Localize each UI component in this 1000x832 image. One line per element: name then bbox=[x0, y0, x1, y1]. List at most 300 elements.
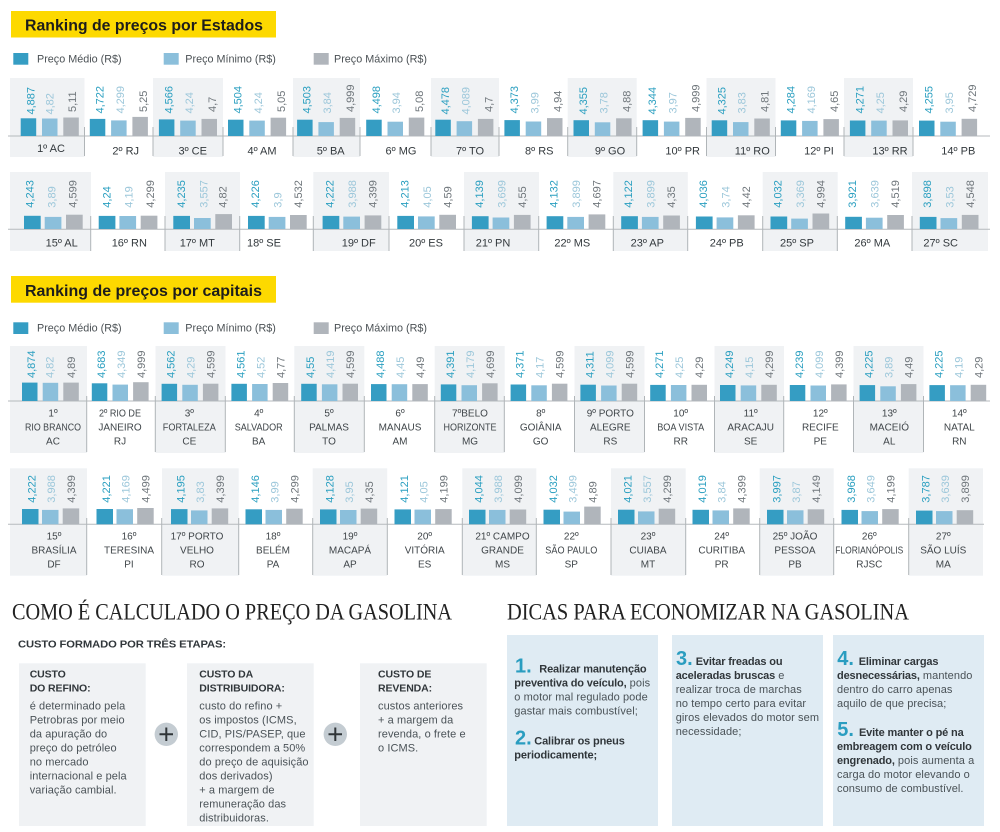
panel: dicas 4 e 5: aquilo de que precisa; bbox=[837, 698, 946, 710]
chart: capitais 2: 4,683 bbox=[96, 350, 108, 378]
chart: capitais 18: 4,299 bbox=[290, 475, 302, 503]
chart: estados 19 DF bbox=[323, 180, 381, 229]
panel: dicas 4 e 5: 5. bbox=[837, 719, 854, 741]
chart: estados 5 BA bbox=[297, 84, 357, 136]
chart: capitais 17: 3,83 bbox=[195, 481, 207, 503]
chart: capitais 16: 4,499 bbox=[140, 475, 152, 503]
heading: ranking por capitais bbox=[11, 276, 276, 303]
panel: dicas 1 e 2: gastar mais combustível; bbox=[514, 706, 638, 718]
panel: dicas 4 e 5: dentro do carro apenas bbox=[837, 684, 953, 696]
panel backgrounds: estados row 1 bbox=[10, 78, 913, 157]
labels: capitais row 2: 27º bbox=[936, 531, 951, 542]
chart: estados 11 RO bbox=[712, 87, 772, 136]
chart: capitais 11: 4,15 bbox=[744, 357, 756, 378]
labels: capitais row 2: CUIABA bbox=[629, 545, 667, 556]
chart: estados 20 ES: 4,05 bbox=[422, 186, 434, 208]
panel backgrounds: capitais row 2 bbox=[10, 468, 983, 576]
chart: estados 9 GO: 4,88 bbox=[622, 91, 634, 112]
labels: capitais row 1: SALVADOR bbox=[235, 423, 283, 434]
chart: capitais 15: 4,399 bbox=[66, 475, 78, 503]
labels: capitais row 2: MA bbox=[936, 559, 951, 570]
labels: capitais row 2: PESSOA bbox=[774, 545, 816, 556]
chart: capitais 9: 4,599 bbox=[624, 350, 636, 378]
chart: estados 26 MA: 4,519 bbox=[890, 180, 902, 208]
chart: estados 8 RS: 4,94 bbox=[552, 91, 564, 112]
chart: estados 3 CE: 4,24 bbox=[184, 92, 196, 114]
chart: estados 1 AC: 4,82 bbox=[44, 93, 56, 114]
chart: capitais 6 bbox=[371, 350, 428, 401]
panel: custo do refino: preço do petróleo bbox=[30, 742, 117, 754]
chart: estados 16 RN bbox=[99, 180, 157, 229]
labels: capitais row 2: 26º bbox=[862, 531, 877, 542]
chart: capitais 18: 4,146 bbox=[250, 475, 262, 503]
chart: estados 24 PB: 3,74 bbox=[720, 186, 732, 208]
labels: capitais row 1: MACEIÓ bbox=[870, 421, 909, 434]
chart: estados 23 AP: 4,122 bbox=[623, 180, 635, 208]
labels: capitais row 2: PB bbox=[788, 559, 802, 570]
chart: estados 15 AL: 4,243 bbox=[24, 180, 36, 208]
panel: custo da distribuidora: distribuidoras. bbox=[199, 812, 269, 824]
legend: capitais bbox=[13, 322, 427, 335]
chart: estados 17 MT: 3,557 bbox=[198, 180, 210, 208]
labels: capitais row 1: RR bbox=[673, 437, 688, 448]
labels: capitais row 2: 22º bbox=[564, 531, 579, 542]
labels: estados row 1: 5º BA bbox=[317, 146, 345, 158]
labels: capitais row 1: NATAL bbox=[944, 423, 975, 434]
chart: capitais 3: 4,29 bbox=[186, 357, 198, 378]
labels: capitais row 2: 17º PORTO bbox=[171, 531, 224, 542]
chart: capitais 5: 4,55 bbox=[305, 357, 317, 378]
chart: capitais 24 bbox=[692, 475, 750, 524]
chart: capitais 3: 4,599 bbox=[206, 350, 218, 378]
chart: capitais 1: 4,82 bbox=[44, 357, 56, 378]
labels: capitais row 2: GRANDE bbox=[481, 545, 524, 556]
panel: custo da distribuidora: remuneração das bbox=[199, 798, 287, 810]
section: dicas bbox=[507, 599, 984, 826]
panel: dicas 1 e 2: Calibrar os pneus bbox=[534, 736, 625, 748]
chart: estados 7 TO: 4,7 bbox=[483, 97, 495, 112]
chart: capitais 13: 4,225 bbox=[864, 350, 876, 378]
chart: estados 22 MS: 4,697 bbox=[592, 180, 604, 208]
panel: custo da distribuidora: + a margem de bbox=[199, 784, 275, 796]
chart: capitais 11 bbox=[720, 350, 777, 401]
chart: estados 1 AC: 4,887 bbox=[25, 87, 37, 114]
chart: estados 23 AP: 3,899 bbox=[646, 180, 658, 208]
chart: estados 8 RS: 4,373 bbox=[509, 86, 521, 114]
chart: estados 24 PB: 4,036 bbox=[698, 180, 710, 208]
panel: custo de revenda: CUSTO DE bbox=[378, 668, 431, 680]
labels: capitais row 1: 8º bbox=[536, 409, 546, 420]
labels: capitais row 2: RO bbox=[190, 559, 205, 570]
labels: estados row 2: 25º SP bbox=[780, 238, 814, 250]
chart: capitais 26 bbox=[842, 475, 899, 524]
legend: estados: Preço Máximo (R$) bbox=[334, 53, 427, 65]
labels: estados row 1: 3º CE bbox=[178, 146, 207, 158]
labels: capitais row 1: RS bbox=[603, 437, 618, 448]
chart: estados 8 RS: 3,99 bbox=[529, 92, 541, 114]
chart: estados 15 AL bbox=[24, 180, 83, 229]
chart: estados 14 PB: 4,729 bbox=[967, 84, 979, 112]
chart: estados 16 RN: 4,24 bbox=[102, 186, 114, 208]
chart: capitais 24: 4,019 bbox=[697, 475, 709, 503]
panel: dicas 1 e 2 bbox=[507, 635, 658, 826]
panel: dicas 4 e 5 bbox=[833, 635, 984, 826]
panel: custo da distribuidora: CUSTO DA bbox=[199, 668, 254, 680]
chart: capitais 17: 4,399 bbox=[215, 475, 227, 503]
labels: estados row 1 bbox=[37, 143, 975, 158]
labels: capitais row 2: ES bbox=[418, 559, 432, 570]
icon: plus 2 bbox=[324, 723, 347, 746]
labels: capitais row 1: GO bbox=[533, 437, 549, 448]
chart: estados 7 TO: 4,478 bbox=[440, 87, 452, 114]
chart: estados 18 SE: 4,532 bbox=[293, 180, 305, 208]
labels: capitais row 2: SÃO LUÍS bbox=[920, 543, 967, 556]
chart: capitais 24: 3,84 bbox=[716, 481, 728, 503]
labels: capitais row 1: 9º PORTO bbox=[587, 409, 634, 420]
labels: estados row 1: 1º AC bbox=[37, 143, 65, 155]
chart: capitais 15 bbox=[22, 475, 79, 524]
labels: capitais row 1: TO bbox=[322, 437, 336, 448]
chart: estados 26 MA: 3,639 bbox=[870, 180, 882, 208]
chart: capitais 17 bbox=[171, 475, 228, 524]
chart: capitais 13 bbox=[860, 350, 916, 401]
labels: capitais row 2: BELÉM bbox=[256, 543, 290, 556]
chart: capitais 20 bbox=[394, 475, 452, 524]
labels: capitais row 2: 18º bbox=[266, 531, 281, 542]
chart: capitais 10: 4,25 bbox=[674, 357, 686, 378]
panel: dicas 1 e 2: Realizar manutenção bbox=[539, 664, 647, 676]
chart: estados 10 PR: 3,97 bbox=[668, 92, 680, 114]
panel: dicas 1 e 2: periodicamente; bbox=[514, 750, 597, 762]
chart: capitais 27 bbox=[916, 475, 973, 524]
panel: custo de revenda: custos anteriores bbox=[378, 700, 464, 712]
chart: capitais 6: 4,49 bbox=[415, 357, 427, 378]
chart: estados 12 PI bbox=[781, 86, 841, 136]
panel: dicas 4 e 5: carga do motor elevando o bbox=[837, 769, 970, 781]
chart: capitais 7: 4,699 bbox=[485, 350, 497, 378]
chart: capitais 26: 3,649 bbox=[866, 475, 878, 503]
chart: capitais 14: 4,29 bbox=[973, 357, 985, 378]
chart: capitais 5 bbox=[301, 350, 358, 401]
panel backgrounds: estados row 2 bbox=[10, 172, 988, 251]
panel: custo da distribuidora: os impostos (ICMS, bbox=[199, 714, 297, 726]
chart: capitais 21 bbox=[469, 475, 526, 524]
chart: capitais 4: 4,77 bbox=[275, 357, 287, 378]
chart: estados 15 AL: 3,89 bbox=[47, 186, 59, 208]
chart: estados 11 RO: 3,83 bbox=[737, 92, 749, 114]
labels: capitais row 1: RIO BRANCO bbox=[25, 423, 81, 434]
chart: capitais 5: 4,599 bbox=[345, 350, 357, 378]
labels: capitais row 2: BRASÍLIA bbox=[31, 543, 77, 556]
chart: estados 13 RR bbox=[850, 86, 910, 136]
chart: estados 19 DF: 4,399 bbox=[368, 180, 380, 208]
panel: custo do refino: da apuração do bbox=[30, 728, 107, 740]
heading: como é calculado: COMO É CALCULADO O PREÇO DA GASOLINA bbox=[12, 599, 452, 624]
labels: capitais row 1: RN bbox=[952, 437, 967, 448]
chart: capitais 19: 3,95 bbox=[344, 481, 356, 503]
labels: capitais row 1: HORIZONTE bbox=[444, 423, 497, 434]
labels: capitais row 2: MT bbox=[641, 559, 655, 570]
panel: custo da distribuidora: custo do refino + bbox=[199, 700, 282, 712]
chart: estados 10 PR bbox=[643, 84, 703, 136]
panel: dicas 4 e 5: Eliminar cargas bbox=[859, 656, 938, 668]
chart: capitais 27: 3,899 bbox=[960, 475, 972, 503]
labels: capitais row 1: 4º bbox=[254, 409, 264, 420]
labels: capitais row 1: RECIFE bbox=[802, 423, 839, 434]
chart: estados 27 SC bbox=[920, 180, 978, 229]
legend: capitais: Preço Mínimo (R$) bbox=[185, 323, 276, 335]
chart: estados 2 RJ: 4,299 bbox=[115, 86, 127, 114]
chart: estados 5 BA: 4,503 bbox=[302, 86, 314, 114]
panel: custo de revenda: REVENDA: bbox=[378, 682, 432, 694]
labels: estados row 2: 19º DF bbox=[342, 238, 376, 250]
chart: estados 21 PN: 4,139 bbox=[474, 180, 486, 208]
labels: estados row 1: 7º TO bbox=[456, 146, 484, 158]
chart: estados 14 PB: 4,255 bbox=[924, 86, 936, 114]
labels: estados row 2: 15º AL bbox=[46, 238, 78, 250]
chart: capitais 8 bbox=[511, 350, 567, 401]
chart: estados 12 PI: 4,65 bbox=[829, 91, 841, 112]
chart: capitais 22 bbox=[544, 475, 601, 524]
panel: custo do refino bbox=[19, 663, 146, 826]
chart: capitais 2: 4,349 bbox=[116, 350, 128, 378]
chart: capitais 16: 4,169 bbox=[120, 475, 132, 503]
chart: capitais 19: 4,128 bbox=[325, 475, 337, 503]
chart: estados 4 AM: 5,05 bbox=[276, 91, 288, 112]
heading: ranking por capitais: Ranking de preços por capitais bbox=[25, 283, 262, 300]
legend: estados: Preço Médio (R$) bbox=[37, 53, 122, 65]
chart: capitais 14: 4,19 bbox=[953, 357, 965, 378]
labels: capitais row 1: PALMAS bbox=[309, 423, 349, 434]
panel: dicas 4 e 5: consumo de combustível. bbox=[837, 783, 964, 795]
chart: capitais 4: 4,52 bbox=[255, 357, 267, 378]
chart: estados 18 SE: 3,9 bbox=[272, 192, 284, 208]
labels: capitais row 2: MS bbox=[495, 559, 510, 570]
chart: capitais 25 bbox=[767, 475, 824, 524]
panel: dica 3 bbox=[672, 635, 823, 826]
chart: estados 12 PI: 4,284 bbox=[785, 86, 797, 114]
chart: estados 7 TO: 4,089 bbox=[460, 87, 472, 114]
chart: estados 19 DF: 4,222 bbox=[325, 180, 337, 208]
chart: estados 11 RO: 4,81 bbox=[760, 91, 772, 112]
labels: capitais row 2: CURITIBA bbox=[698, 545, 745, 556]
chart: capitais 1: 4,89 bbox=[66, 357, 78, 378]
chart: capitais 7: 4,179 bbox=[465, 350, 477, 378]
chart: estados 7 TO bbox=[435, 87, 495, 136]
labels: capitais row 2: PR bbox=[715, 559, 729, 570]
labels: estados row 1: 4º AM bbox=[247, 146, 277, 158]
panel: custo do refino: CUSTO bbox=[30, 668, 66, 680]
chart: capitais 20: 4,199 bbox=[438, 475, 450, 503]
labels: estados row 2: 27º SC bbox=[923, 238, 958, 250]
labels: estados row 1: 2º RJ bbox=[112, 146, 139, 158]
chart: capitais 5: 4,419 bbox=[325, 350, 337, 378]
chart: estados 4 AM: 4,504 bbox=[233, 86, 245, 114]
chart: capitais 4 bbox=[231, 350, 288, 401]
chart: estados 27 SC: 3,53 bbox=[944, 186, 956, 208]
chart: capitais 27: 3,787 bbox=[921, 475, 933, 503]
labels: capitais row 2: DF bbox=[47, 559, 61, 570]
chart: estados 25 SP: 4,032 bbox=[772, 180, 784, 208]
chart: estados 20 ES: 4,213 bbox=[399, 180, 411, 208]
chart: estados 4 AM bbox=[228, 86, 288, 136]
panel: custo da distribuidora: correspondem a 50% bbox=[199, 742, 305, 754]
labels: estados row 1: 14º PB bbox=[941, 146, 975, 158]
labels: estados row 1: 8º RS bbox=[525, 146, 554, 158]
labels: capitais row 1: 1º bbox=[48, 409, 58, 420]
labels: estados row 2: 18º SE bbox=[247, 238, 281, 250]
labels: capitais row 1: PE bbox=[814, 437, 827, 448]
labels: capitais row 1: MANAUS bbox=[379, 423, 422, 434]
chart: estados 13 RR: 4,29 bbox=[898, 91, 910, 112]
labels: capitais row 1 bbox=[25, 409, 975, 448]
chart: capitais 11: 4,299 bbox=[764, 350, 776, 378]
legend: estados bbox=[13, 53, 427, 65]
chart: capitais 23 bbox=[618, 475, 675, 524]
panel: dica 3: necessidade; bbox=[676, 726, 741, 738]
chart: capitais 26: 4,199 bbox=[886, 475, 898, 503]
chart: estados 18 SE bbox=[248, 180, 307, 229]
chart: estados 22 MS bbox=[547, 180, 605, 229]
chart: estados 6 MG: 5,08 bbox=[414, 91, 426, 112]
section: ranking por capitais bbox=[8, 276, 990, 576]
panel: dicas 1 e 2: 1. bbox=[515, 656, 532, 678]
chart: capitais 9 bbox=[580, 350, 637, 401]
labels: capitais row 2: TERESINA bbox=[104, 545, 154, 556]
chart: estados 10 PR: 4,344 bbox=[647, 87, 659, 114]
labels: estados row 2: 26º MA bbox=[854, 238, 891, 250]
labels: estados row 1: 12º PI bbox=[804, 146, 834, 158]
chart: capitais 22: 3,499 bbox=[568, 475, 580, 503]
labels: capitais row 2: MACAPÁ bbox=[329, 543, 371, 556]
chart: capitais 15: 4,222 bbox=[27, 475, 39, 503]
chart: capitais 9: 4,311 bbox=[584, 351, 596, 378]
labels: estados row 2: 21º PN bbox=[476, 238, 510, 250]
panel: custo do refino: DO REFINO: bbox=[30, 682, 91, 694]
chart: capitais 23: 3,557 bbox=[642, 475, 654, 503]
chart: capitais 12: 4,239 bbox=[794, 350, 806, 378]
chart: capitais 27: 3,639 bbox=[940, 475, 952, 503]
labels: capitais row 1: ARACAJU bbox=[727, 423, 774, 434]
chart: estados 3 CE: 4,566 bbox=[163, 86, 175, 114]
labels: capitais row 1: MG bbox=[462, 437, 478, 448]
labels: estados row 1: 6º MG bbox=[386, 146, 416, 158]
chart: capitais 22: 4,032 bbox=[548, 475, 560, 503]
chart: capitais 14 bbox=[929, 350, 986, 401]
chart: capitais 12: 4,099 bbox=[814, 350, 826, 378]
chart: capitais 22: 4,89 bbox=[588, 481, 600, 503]
panel: custo do refino: variação cambial. bbox=[30, 784, 117, 796]
chart: estados 23 AP bbox=[621, 180, 680, 229]
chart: capitais 13: 3,89 bbox=[884, 357, 896, 378]
chart: capitais 26: 3,968 bbox=[846, 475, 858, 503]
chart: capitais 3 bbox=[162, 350, 218, 401]
labels: capitais row 1: 5º bbox=[324, 409, 334, 420]
chart: capitais 18: 3,99 bbox=[270, 481, 282, 503]
panel: custo da distribuidora bbox=[187, 663, 314, 826]
panel: custo do refino: Petrobras por meio bbox=[30, 714, 125, 726]
panel: custo da distribuidora: dos derivados) bbox=[199, 770, 273, 782]
panel: custo de revenda: revenda, o frete e bbox=[378, 728, 466, 740]
chart: capitais 9: 4,099 bbox=[604, 350, 616, 378]
labels: estados row 2 bbox=[46, 238, 958, 250]
chart: capitais 8: 4,371 bbox=[515, 350, 527, 378]
labels: capitais row 2: 20º bbox=[417, 531, 432, 542]
chart: estados 5 BA: 4,999 bbox=[345, 84, 357, 112]
labels: capitais row 1: JANEIRO bbox=[98, 423, 142, 434]
chart: estados 12 PI: 4,169 bbox=[806, 86, 818, 114]
labels: capitais row 1: 6º bbox=[395, 409, 405, 420]
chart: estados 17 MT bbox=[173, 180, 232, 229]
labels: capitais row 2: 21º CAMPO bbox=[475, 531, 530, 542]
labels: capitais row 1: 13º bbox=[882, 409, 897, 420]
labels: estados row 1: 9º GO bbox=[595, 146, 626, 158]
chart: estados 10 PR: 4,999 bbox=[691, 84, 703, 112]
labels: capitais row 1: ALEGRE bbox=[590, 423, 631, 434]
labels: capitais row 1: BA bbox=[252, 437, 266, 448]
panel: dicas 4 e 5: 4. bbox=[837, 648, 854, 670]
labels: capitais row 2: 16º bbox=[122, 531, 137, 542]
labels: capitais row 1: AL bbox=[883, 437, 896, 448]
chart: capitais 25: 3,87 bbox=[791, 481, 803, 503]
chart: estados 23 AP: 4,35 bbox=[666, 186, 678, 208]
chart: estados 14 PB: 3,95 bbox=[944, 92, 956, 114]
chart: capitais 21: 3,988 bbox=[493, 475, 505, 503]
subheading: custo formado: CUSTO FORMADO POR TRÊS ETAPAS: bbox=[18, 637, 226, 650]
chart: estados 24 PB: 4,42 bbox=[741, 186, 753, 208]
chart: estados 11 RO: 4,325 bbox=[716, 87, 728, 114]
labels: capitais row 2: 25º JOÃO bbox=[773, 529, 818, 542]
labels: estados row 1: 11º RO bbox=[735, 146, 770, 158]
chart: estados 16 RN: 4,19 bbox=[124, 186, 136, 208]
chart: capitais 2: 4,999 bbox=[136, 350, 148, 378]
panel: custo de revenda: o ICMS. bbox=[378, 742, 418, 754]
labels: capitais row 1: RJ bbox=[114, 437, 126, 448]
panel: custo do refino: é determinado pela bbox=[30, 700, 126, 712]
panel: dicas 1 e 2: preventiva do veículo, pois bbox=[514, 678, 651, 690]
icon: plus 1 bbox=[155, 723, 178, 746]
chart: estados 21 PN: 4,55 bbox=[517, 186, 529, 208]
panel: dica 3: aceleradas bruscas e bbox=[676, 670, 784, 682]
chart: capitais 7: 4,391 bbox=[445, 350, 457, 378]
chart: estados 9 GO: 4,355 bbox=[578, 87, 590, 114]
chart: capitais 19: 4,35 bbox=[364, 481, 376, 503]
chart: estados 21 PN: 3,699 bbox=[496, 180, 508, 208]
chart: capitais 24: 4,399 bbox=[736, 475, 748, 503]
panel: custo da distribuidora: CID, PIS/PASEP, que bbox=[199, 728, 306, 740]
chart: estados 14 PB bbox=[919, 84, 979, 136]
chart: capitais 18 bbox=[246, 475, 303, 524]
chart: estados 21 PN bbox=[472, 180, 531, 229]
labels: capitais row 1: FORTALEZA bbox=[163, 423, 216, 434]
chart: estados 17 MT: 4,235 bbox=[176, 180, 188, 208]
section: como é calculado bbox=[12, 599, 487, 826]
section: ranking por estados bbox=[8, 11, 990, 251]
chart: capitais 23: 4,299 bbox=[662, 475, 674, 503]
chart: capitais 12 bbox=[790, 350, 847, 401]
chart: capitais 23: 4,021 bbox=[623, 475, 635, 503]
panel: dica 3: giros elevados do motor sem bbox=[676, 712, 819, 724]
chart: estados 22 MS: 4,132 bbox=[549, 180, 561, 208]
chart: capitais 21: 4,099 bbox=[513, 475, 525, 503]
labels: estados row 2: 24º PB bbox=[710, 238, 744, 250]
labels: estados row 2: 17º MT bbox=[180, 238, 215, 250]
chart: capitais 25: 3,997 bbox=[772, 475, 784, 503]
chart: estados 8 RS bbox=[504, 86, 564, 136]
chart: estados 20 ES bbox=[397, 180, 456, 229]
chart: estados 25 SP: 4,994 bbox=[816, 180, 828, 208]
chart: capitais 10: 4,271 bbox=[654, 350, 666, 378]
